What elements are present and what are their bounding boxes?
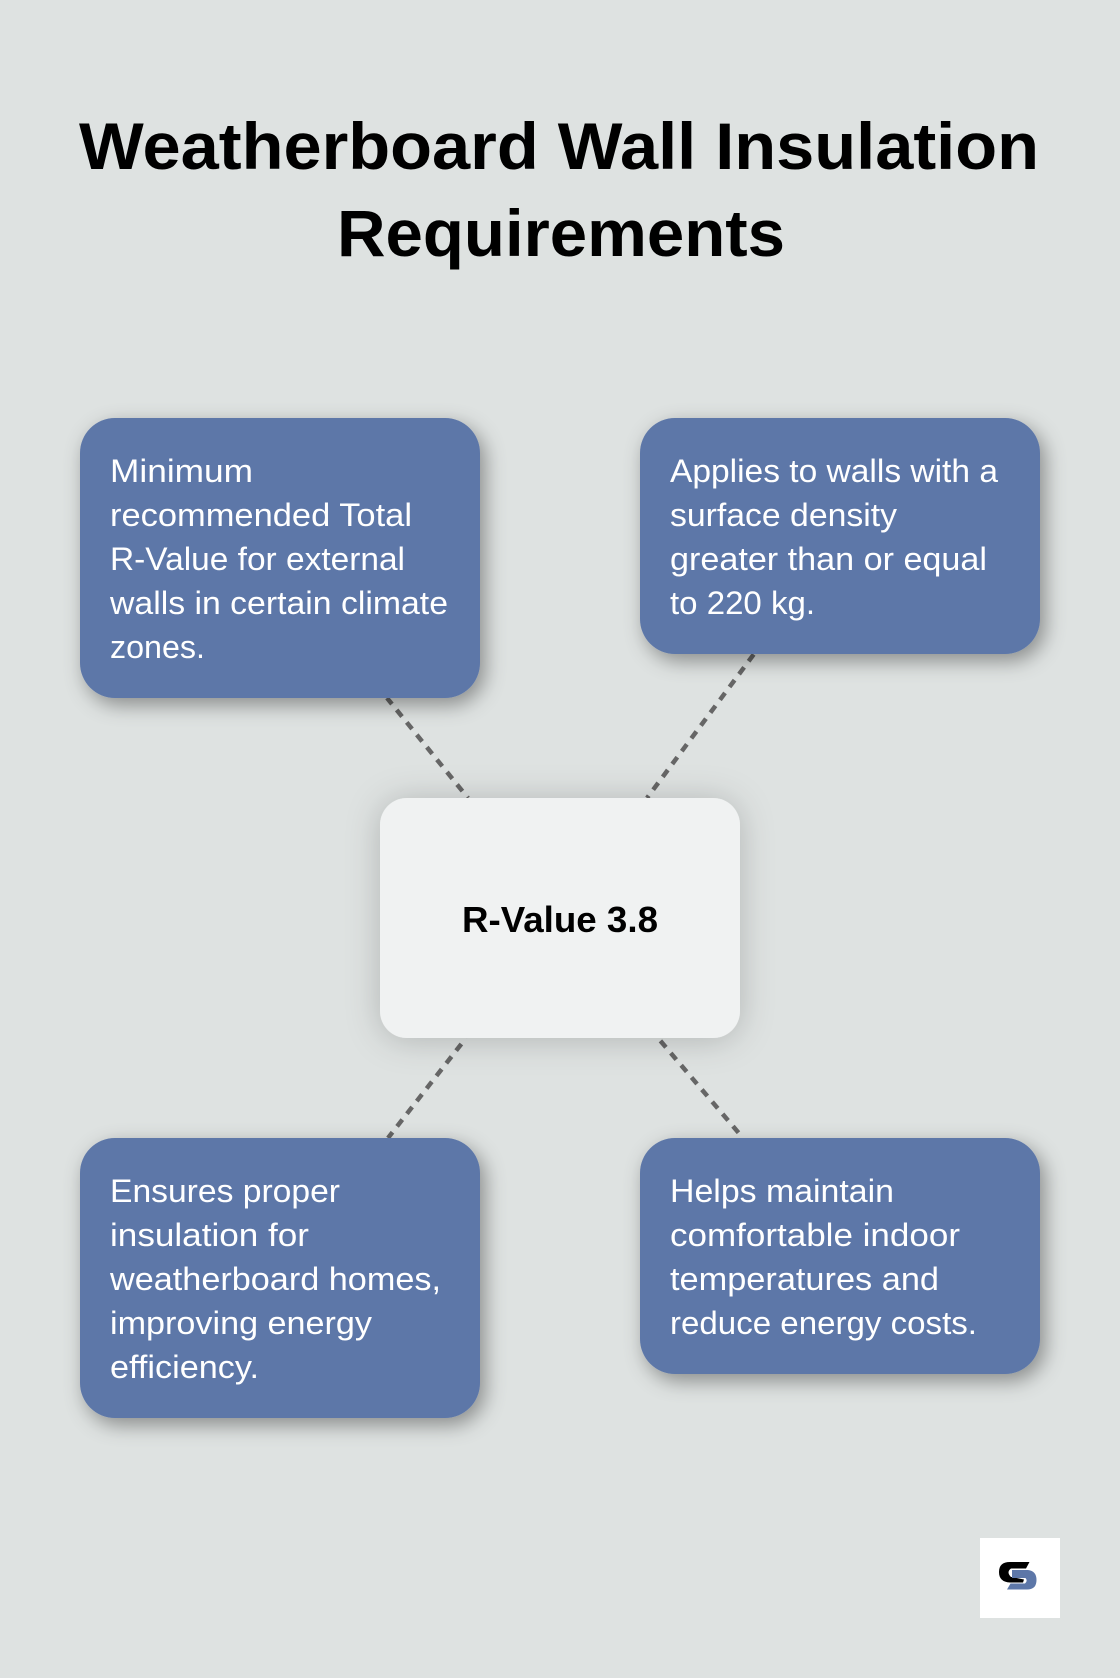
panel: minimum recommended R-value: zones. [110,629,205,665]
connector: bottom-right card to center [658,1038,743,1138]
title: Weatherboard Wall Insulation [79,109,1039,183]
panel: comfort and energy costs: reduce energy costs. [670,1305,977,1341]
panel: surface density: greater than or equal [670,541,987,577]
panel: energy efficiency: Ensures proper [110,1173,340,1209]
panel: surface density: Applies to walls with a [670,453,999,489]
panel: center R-Value: R-Value 3.8 [462,899,658,940]
connector: top-right card to center [647,654,754,798]
panel: minimum recommended R-value: Minimum [110,453,253,489]
panel: surface density: to 220 kg. [670,585,815,621]
title: Requirements [337,196,785,270]
panel: comfort and energy costs [640,1138,1040,1374]
icon: logo [980,1538,1060,1618]
connector: top-left card to center [387,698,468,798]
panel: center R-Value [380,798,740,1038]
panel: energy efficiency: weatherboard homes, [109,1261,441,1297]
panel: surface density: surface density [670,497,898,533]
panel: minimum recommended R-value: walls in certain climate [109,585,448,621]
panel: minimum recommended R-value: R-Value for external [110,541,405,577]
panel: energy efficiency: improving energy [110,1305,373,1341]
panel: energy efficiency: insulation for [110,1217,309,1253]
panel: comfort and energy costs: comfortable indoor [670,1217,960,1253]
panel: energy efficiency: efficiency. [110,1349,259,1385]
connector: bottom-left card to center [388,1038,466,1138]
panel: minimum recommended R-value: recommended Total [110,497,412,533]
panel: comfort and energy costs: Helps maintain [670,1173,894,1209]
panel: minimum recommended R-value [80,418,480,698]
panel: energy efficiency [80,1138,480,1418]
title [79,109,1039,270]
panel: surface density [640,418,1040,654]
panel: comfort and energy costs: temperatures and [670,1261,939,1297]
